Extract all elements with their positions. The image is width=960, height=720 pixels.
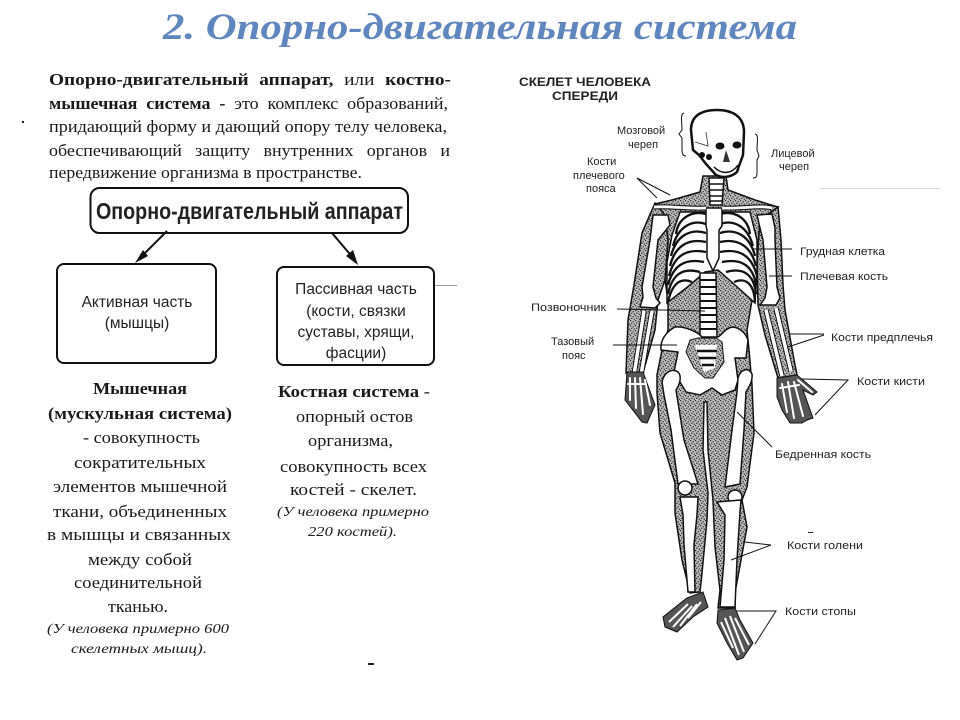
clavicles <box>654 207 772 208</box>
diagram: main box: Опорно-двигательный аппарат <box>96 198 403 224</box>
ribcage <box>667 212 757 303</box>
labels: skeleton parts: Кости голени <box>787 540 863 552</box>
labels: skeleton parts: Лицевой <box>771 148 815 160</box>
text block: bone system: костей - скелет. <box>290 480 417 499</box>
text block: muscular system: ткани, объединенных <box>53 502 228 521</box>
left shin bones <box>680 497 698 592</box>
ribs <box>668 213 757 302</box>
text block: definition <box>49 70 451 182</box>
left femur <box>662 370 698 484</box>
text block: muscular system: элементов мышечной <box>53 477 227 496</box>
box: passive part: суставы, хрящи, <box>298 324 414 341</box>
labels: skeleton parts <box>531 125 933 618</box>
text block: muscular system: между собой <box>88 550 192 569</box>
arrow: to passive part <box>332 233 358 265</box>
text block: bone system: (У человека примерно <box>277 505 429 520</box>
text block: muscular system: - совокупность <box>83 428 200 447</box>
right hand <box>777 375 817 423</box>
text block: muscular system: (У человека примерно 600 <box>47 622 229 637</box>
sacrum <box>686 338 724 378</box>
labels: skeleton parts: пояса <box>586 183 617 195</box>
heading: skeleton front view: СКЕЛЕТ ЧЕЛОВЕКА <box>519 77 651 89</box>
labels: skeleton parts: Кости предплечья <box>831 332 933 344</box>
labels: skeleton parts: Грудная клетка <box>800 246 886 258</box>
text block: muscular system: Мышечная <box>93 379 187 398</box>
left humerus <box>640 215 670 308</box>
right shin bones <box>717 500 741 607</box>
labels: skeleton parts: пояс <box>562 350 586 362</box>
text block: definition: передвижение организма в пространстве. <box>49 163 362 182</box>
box: passive part: (кости, связки <box>306 303 406 320</box>
left foot <box>663 592 708 632</box>
text block: bone system: организма, <box>308 431 393 450</box>
labels: skeleton parts: плечевого <box>573 170 625 182</box>
text block: definition: обеспечивающий защиту внутренних органов и <box>49 141 450 160</box>
left arm silhouette <box>626 203 668 373</box>
box: active part <box>57 264 216 363</box>
text block: definition: придающий форму и дающий опору телу человека, <box>49 117 447 136</box>
text block: muscular system: скелетных мышц). <box>71 642 207 657</box>
title: 2. Опорно-двигательная система <box>162 7 797 48</box>
text block: muscular system <box>47 379 232 657</box>
cervical spine <box>709 178 724 205</box>
spine <box>700 273 717 338</box>
box: passive part: Пассивная часть <box>295 281 417 298</box>
box: active part: Активная часть <box>82 294 192 311</box>
text block: definition: мышечная система - это комплекс образований, <box>49 94 448 113</box>
labels: skeleton parts: Тазовый <box>551 336 594 348</box>
text block: muscular system: тканью. <box>108 597 168 616</box>
text block: bone system: 220 костей). <box>308 525 397 540</box>
heading: skeleton front view: СПЕРЕДИ <box>552 91 618 103</box>
heading: skeleton front view <box>519 77 651 103</box>
text block: bone system: опорный остов <box>296 407 413 426</box>
labels: skeleton parts: Кости <box>587 156 616 168</box>
text block: muscular system: в мышцы и связанных <box>47 525 232 544</box>
text block: muscular system: сократительных <box>74 453 207 472</box>
forearm bones <box>634 308 791 376</box>
box: passive part: фасции) <box>326 345 386 362</box>
text block: bone system: совокупность всех <box>280 457 428 476</box>
illustration: human skeleton <box>625 110 817 660</box>
labels: skeleton parts: Плечевая кость <box>800 271 888 283</box>
right foot <box>717 608 753 660</box>
text block: bone system <box>277 382 430 540</box>
body silhouette <box>655 176 778 608</box>
labels: skeleton parts: Позвоночник <box>531 302 606 314</box>
left hand <box>625 372 655 423</box>
scan specks <box>22 121 940 665</box>
arrow: to active part <box>135 231 167 263</box>
box: passive part <box>277 267 434 365</box>
sternum <box>706 208 722 271</box>
text block: definition: Опорно-двигательный аппарат, или костно- <box>49 70 451 89</box>
right femur <box>725 370 752 487</box>
labels: skeleton parts: Мозговой <box>617 125 665 137</box>
skull <box>691 110 744 177</box>
right arm silhouette <box>757 207 797 378</box>
leader lines and brackets <box>613 113 848 644</box>
box: active part: (мышцы) <box>105 315 169 332</box>
text block: bone system: Костная система - <box>278 382 430 401</box>
pelvis <box>661 327 748 395</box>
labels: skeleton parts: Бедренная кость <box>775 449 871 461</box>
labels: skeleton parts: Кости кисти <box>857 376 925 388</box>
text block: muscular system: (мускульная система) <box>48 404 232 423</box>
diagram: main box <box>90 188 408 233</box>
labels: skeleton parts: Кости стопы <box>785 606 856 618</box>
labels: skeleton parts: череп <box>779 161 809 173</box>
kneecaps <box>678 481 692 495</box>
labels: skeleton parts: череп <box>628 139 658 151</box>
right humerus <box>757 214 780 305</box>
text block: muscular system: соединительной <box>74 573 202 592</box>
